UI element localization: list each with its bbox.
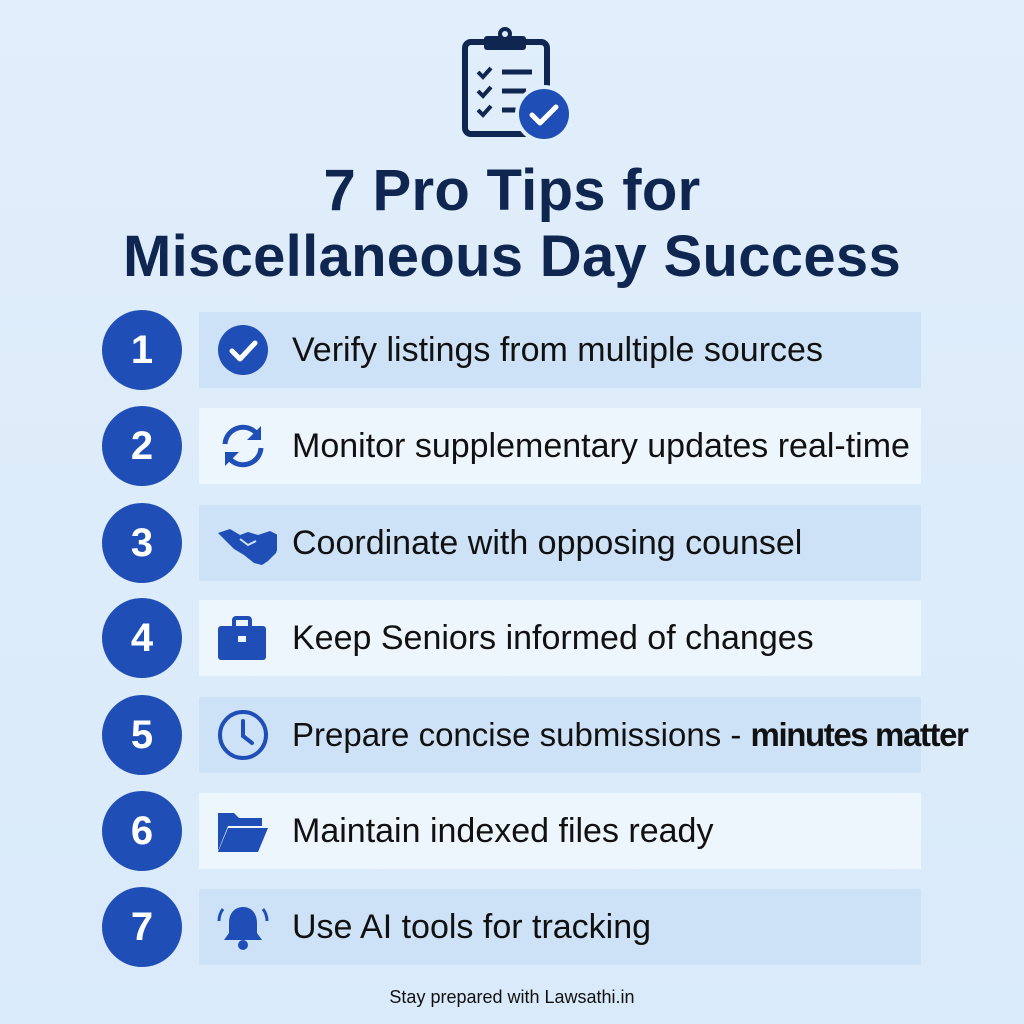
- row 4: 4: [131, 616, 153, 660]
- title: Miscellaneous Day Success: [123, 224, 901, 289]
- title: 7 Pro Tips for: [324, 158, 700, 223]
- icon: clipboard: [462, 27, 569, 139]
- row 6: [102, 791, 921, 871]
- row 2: Monitor supplementary updates real-time: [292, 427, 910, 465]
- row 5: [102, 695, 968, 775]
- footer: Stay prepared with Lawsathi.in: [389, 987, 635, 1007]
- row 5: Prepare concise submissions - minutes matter: [292, 716, 968, 753]
- row 6: Maintain indexed files ready: [292, 812, 713, 850]
- row 7: Use AI tools for tracking: [292, 908, 651, 946]
- row 7: 7: [131, 905, 153, 949]
- row 4: [102, 598, 921, 678]
- row 2: [102, 406, 921, 486]
- row 3: [102, 503, 921, 583]
- row 6: 6: [131, 809, 153, 853]
- row 2: 2: [131, 424, 153, 468]
- row 1: Verify listings from multiple sources: [292, 331, 823, 369]
- row 1: 1: [131, 328, 153, 372]
- row 4: Keep Seniors informed of changes: [292, 619, 814, 657]
- row 5: 5: [131, 713, 153, 757]
- row 3: Coordinate with opposing counsel: [292, 524, 802, 562]
- title: [123, 158, 901, 289]
- row 7: [102, 887, 921, 967]
- row 1: [102, 310, 921, 390]
- row 3: 3: [131, 521, 153, 565]
